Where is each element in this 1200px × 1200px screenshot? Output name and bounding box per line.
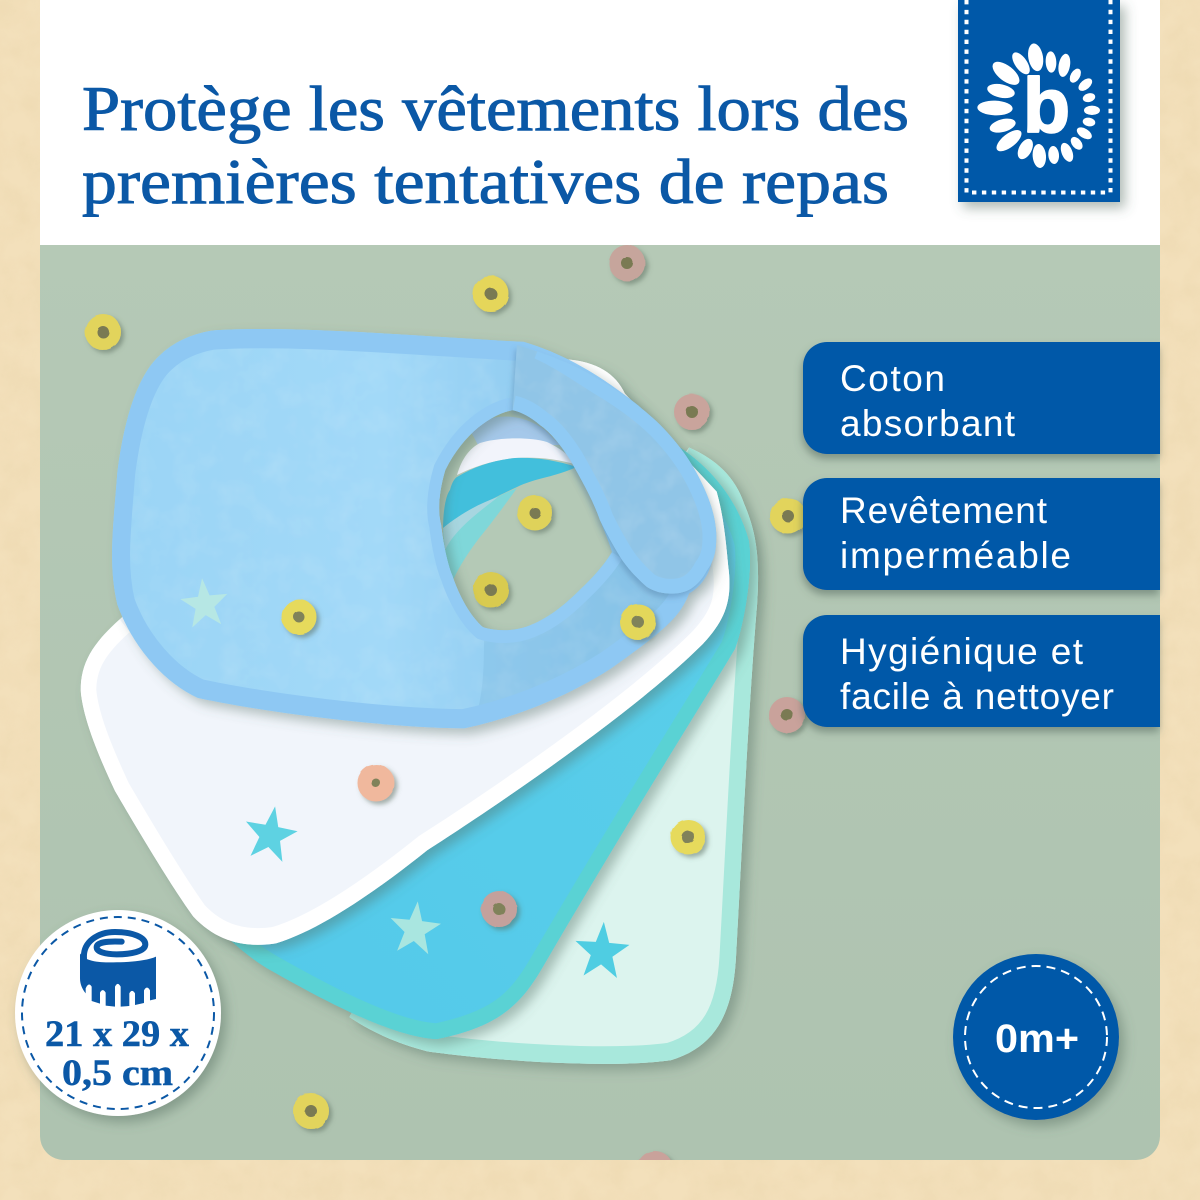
title: Protège les vêtements lors des (82, 73, 909, 144)
photo panel (40, 245, 1160, 1181)
size text (45, 1014, 190, 1094)
cereal rings on table (91, 251, 800, 1181)
stars on lower bibs (241, 801, 631, 979)
bib strap (505, 339, 721, 600)
neck opening (439, 410, 612, 630)
cereal rings in neck opening (479, 502, 546, 602)
blue bib (106, 325, 721, 732)
white header band (40, 0, 1160, 246)
age badge (953, 954, 1119, 1120)
icon: measuring tape (80, 932, 156, 1007)
title (82, 73, 909, 217)
title: premières tentatives de repas (82, 146, 889, 217)
blue bib piping (112, 329, 714, 728)
icon: flower logo (977, 42, 1100, 169)
feature label: coton: absorbant (840, 403, 1016, 444)
feature label: waterproof: Revêtement (840, 490, 1048, 531)
size badge (15, 910, 221, 1116)
white bib (74, 354, 740, 953)
mint bib (350, 448, 770, 1074)
feature label: waterproof: imperméable (840, 535, 1071, 576)
age badge: 0m+ (995, 1017, 1079, 1061)
feature label: hygienic: facile à nettoyer (840, 676, 1114, 717)
feature label: hygienic (803, 615, 1160, 727)
size text: 21 x 29 x (45, 1014, 190, 1055)
lower right shading (479, 641, 498, 705)
feature label: waterproof (803, 478, 1160, 590)
size text: 0,5 cm (62, 1053, 173, 1094)
logo letter b: b (1023, 63, 1070, 149)
teal bib (224, 448, 760, 1050)
feature label: coton (803, 342, 1160, 454)
feature label: hygienic: Hygiénique et (840, 631, 1084, 672)
star on blue bib (180, 578, 227, 627)
cereal rings on bibs (288, 606, 700, 921)
feature label: coton: Coton (840, 358, 945, 399)
neck layers (443, 416, 577, 580)
logo tag (958, 0, 1120, 202)
lower bibs stack (74, 354, 795, 1081)
